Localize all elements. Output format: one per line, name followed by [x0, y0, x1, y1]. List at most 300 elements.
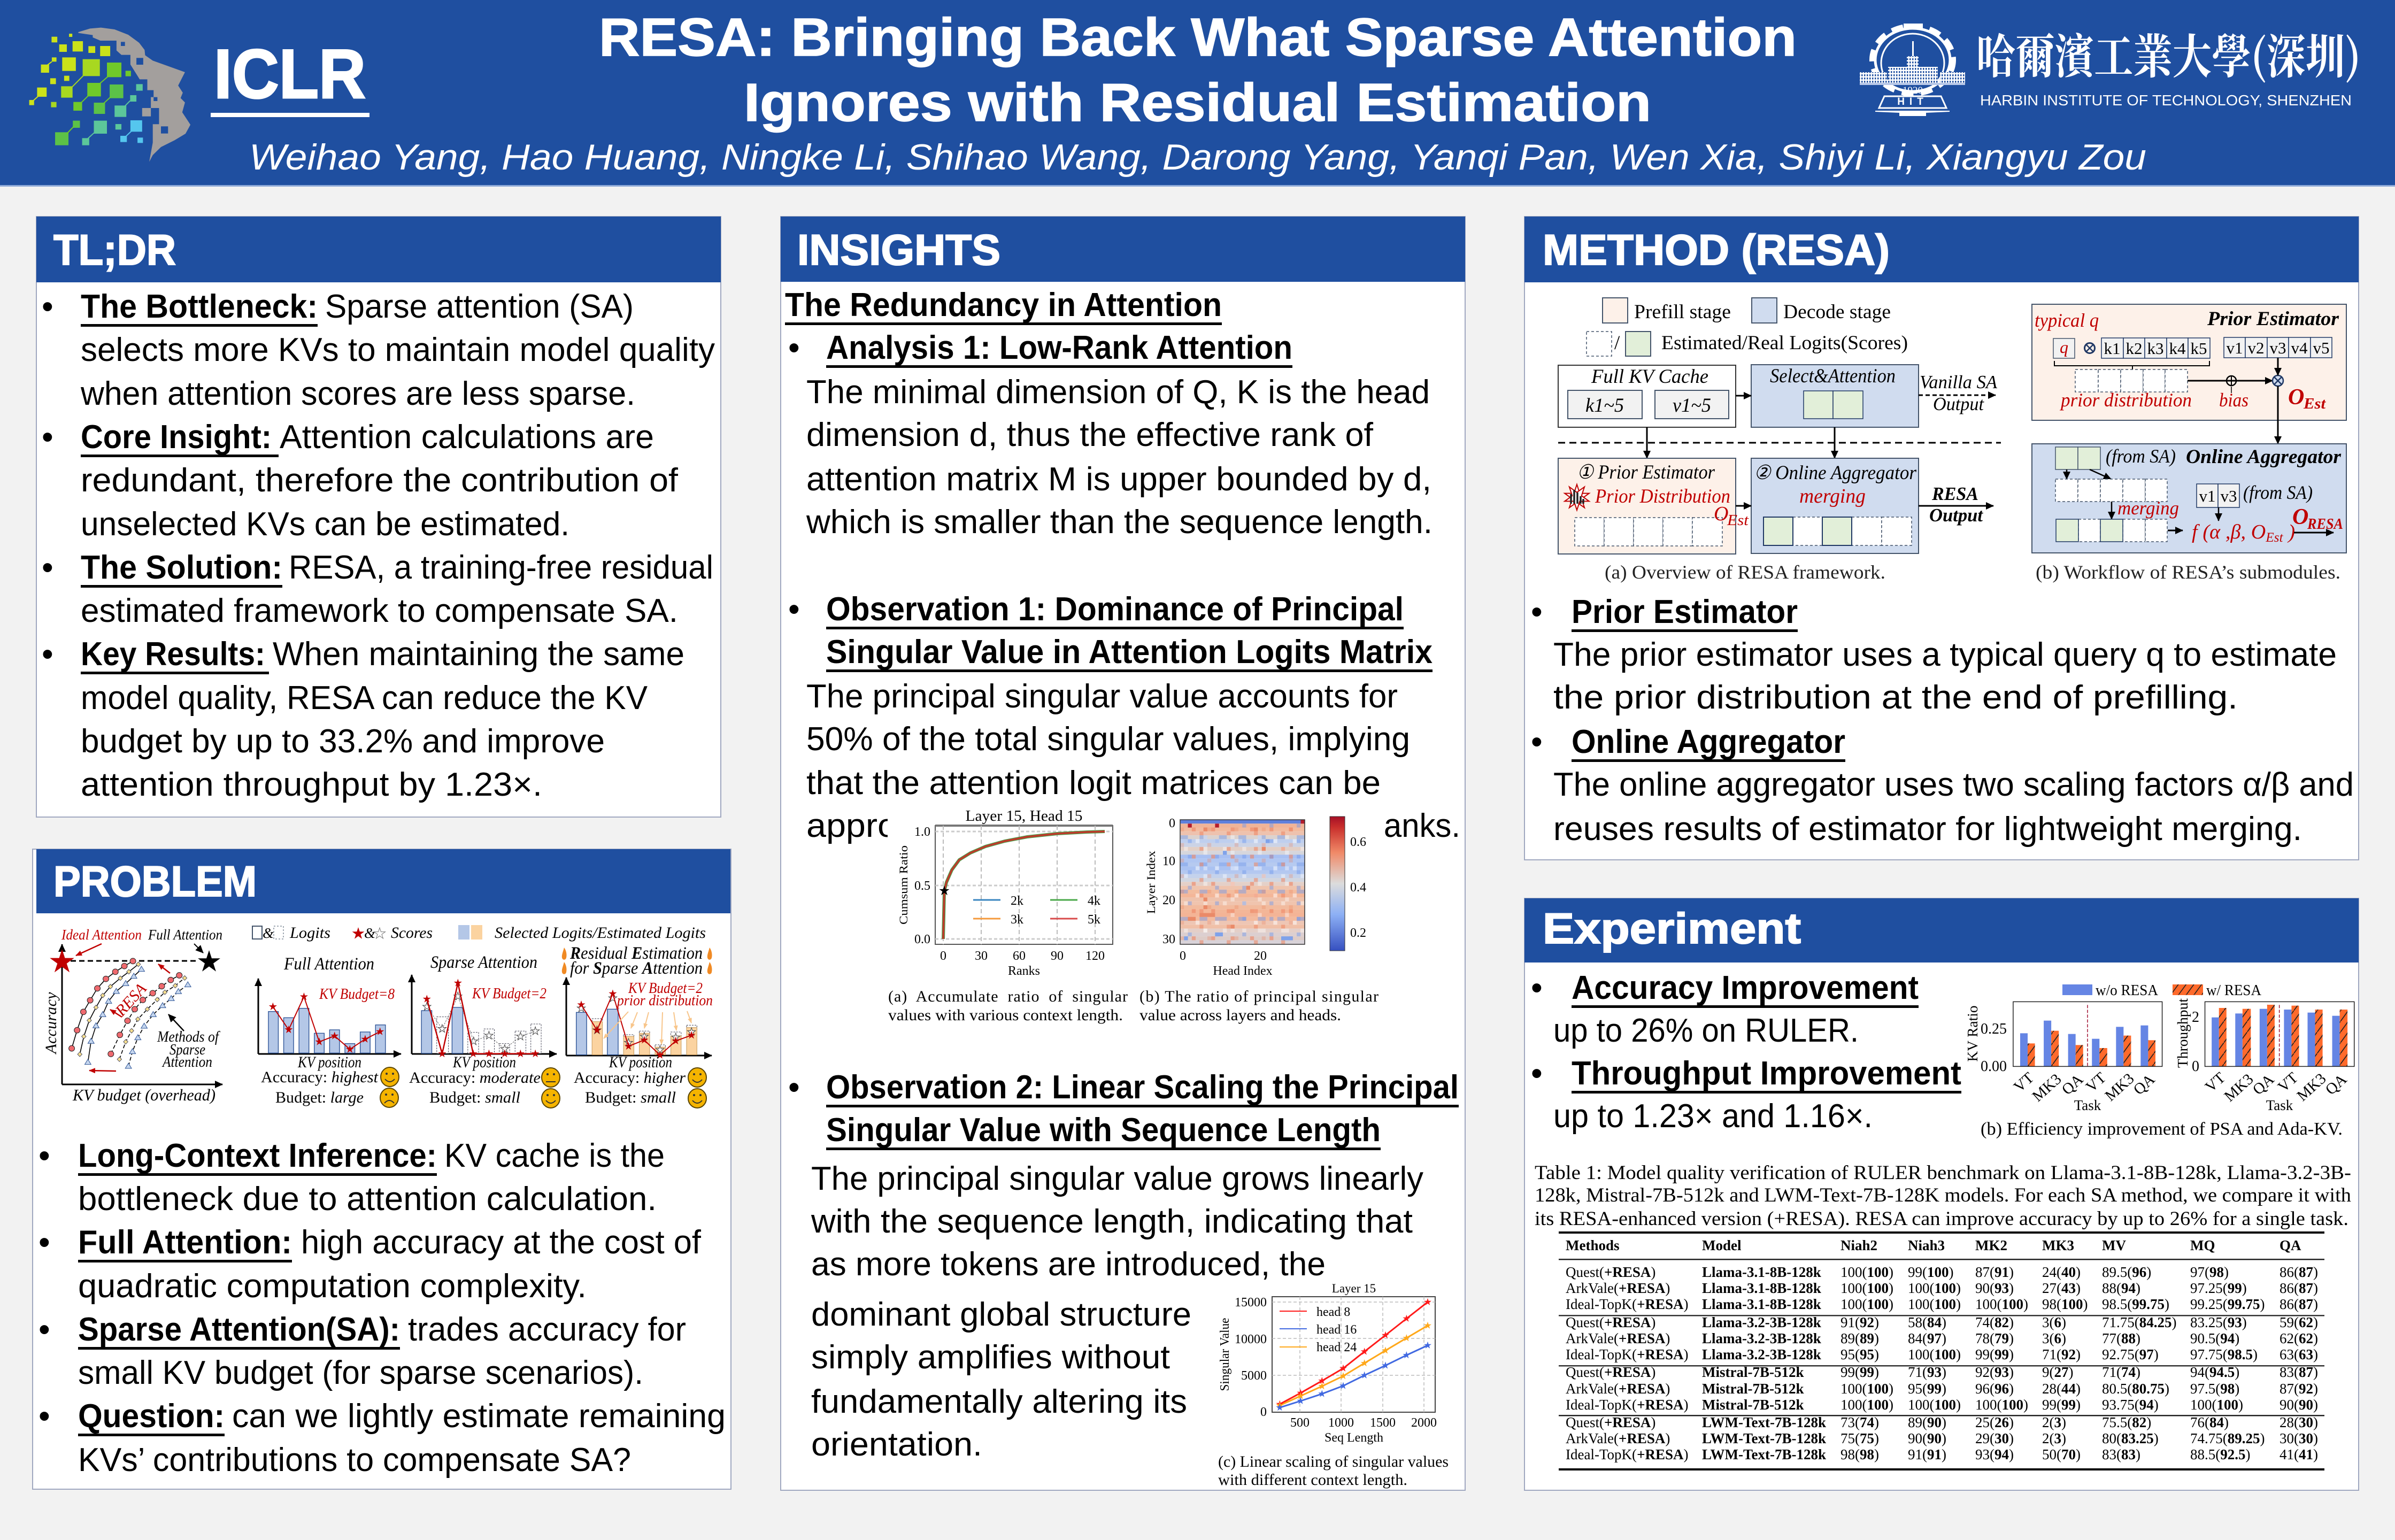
table: model quality verification: 59(62): [2280, 1314, 2318, 1330]
text block: TL;DR bullets: redundant, therefore the contribution of: [81, 462, 679, 499]
box: online aggregator workflow: (from SA): [2243, 482, 2313, 503]
chart: accuracy vs KV budget: Sparse: [170, 1042, 205, 1058]
text block: online aggregator: Online Aggregator: [1572, 723, 1845, 760]
arrow: cache to select: [1736, 395, 1751, 397]
box: full KV cache: Full KV Cache: [1591, 366, 1708, 388]
text block: observation 2: with the sequence length, indicating that: [811, 1203, 1413, 1240]
table: model quality verification: Llama-3.1-8B-128k: [1702, 1264, 1821, 1280]
text block: TL;DR bullets: •: [42, 419, 53, 456]
text block: PROBLEM bullets: Full Attention:: [78, 1224, 292, 1261]
table: model quality verification: LWM-Text-7B-128k: [1702, 1414, 1826, 1430]
text block: TL;DR bullets: unselected KVs can be estimated.: [81, 506, 569, 543]
text block: observation 1: •: [788, 591, 800, 628]
box: online aggregator workflow: O: [2292, 505, 2308, 529]
colorbar: 0.4: [1350, 881, 1366, 895]
figure: singular value line chart: [1218, 1282, 1437, 1445]
icon: HIT emblem: 1920: [1903, 85, 1923, 96]
bar chart: KV ratio: 0.00: [1981, 1058, 2007, 1075]
text block: online aggregator: The online aggregator uses two scaling factors α/β and: [1553, 766, 2354, 803]
table: model quality verification: 89.5(96): [2102, 1264, 2151, 1280]
figure: cumulative ratio plot: 90: [1051, 949, 1064, 963]
table: model quality verification: 100(100): [1840, 1296, 1893, 1312]
table caption: [1535, 1162, 2352, 1230]
arrow and label: O_Est: O: [1714, 503, 1728, 525]
text block: online aggregator: reuses results of estimator for lightweight merging.: [1553, 811, 2302, 848]
table: model quality verification: 71.75(84.25): [2102, 1314, 2176, 1330]
table: model quality verification: MK2: [1975, 1237, 2007, 1253]
box: online aggregator workflow: merging: [2117, 497, 2179, 519]
caption: figure c: (c) Linear scaling of singular values: [1218, 1453, 1449, 1470]
text block: improvements: up to 26% on RULER.: [1553, 1012, 1859, 1049]
table: model quality verification: 100(100): [2190, 1397, 2243, 1413]
chart: sparse attention: Accuracy: moderate: [409, 1069, 541, 1087]
figure: singular value line chart: head 8: [1316, 1305, 1350, 1319]
caption: figures a and b: (a) Accumulate ratio of singular: [888, 988, 1128, 1005]
chart: sparse attention: Sparse Attention: [430, 953, 537, 972]
legend: stages and logits: Prefill stage: [1634, 301, 1731, 323]
table: model quality verification: 86(87): [2280, 1296, 2318, 1312]
text block: TL;DR bullets: Core Insight:: [81, 419, 272, 456]
bar chart: KV ratio: [1965, 1002, 2162, 1113]
bar chart: KV ratio: 0.25: [1981, 1021, 2007, 1037]
text block: improvements: up to 1.23× and 1.16×.: [1553, 1098, 1873, 1135]
table: model quality verification: 90.5(94): [2190, 1330, 2239, 1346]
chart: sparse attention: KV Budget=2: [472, 985, 546, 1002]
text block: TL;DR bullets: •: [42, 636, 53, 673]
table: model quality verification: 3(6): [2042, 1314, 2066, 1330]
table caption: Table 1: Model quality verification of RULER benchmark on Llama-3.1-8B-128k, Llama-3.2-3B-: [1535, 1162, 2351, 1184]
table: model quality verification: 58(84): [1908, 1314, 1946, 1330]
table: model quality verification: 98(98): [1840, 1446, 1879, 1462]
RESA output: [1919, 483, 1993, 526]
text block: PROBLEM bullets: [38, 1137, 726, 1479]
legend: with and without RESA: w/ RESA: [2206, 982, 2262, 999]
bar chart: KV ratio: KV Ratio: [1965, 1005, 1981, 1062]
text block: TL;DR bullets: budget by up to 33.2% and improve: [81, 723, 605, 760]
chart: accuracy vs KV budget: Attention: [161, 1054, 212, 1071]
text block: observation 1: Singular Value in Attention Logits Matrix: [826, 634, 1433, 671]
table: model quality verification: 100(100): [1840, 1381, 1893, 1397]
panel: PROBLEM: [33, 849, 731, 1489]
box: online aggregator workflow: v3: [2220, 487, 2237, 505]
figure: singular value line chart: head 16: [1316, 1323, 1357, 1337]
text block: TL;DR bullets: selects more KVs to maintain model quality: [81, 332, 715, 368]
icon: prior distribution burst: [1561, 480, 1595, 513]
caption: figures a and b: (b) The ratio of principal singular: [1139, 988, 1379, 1005]
bar chart: KV ratio: QA: [2130, 1071, 2158, 1098]
colorbar: 0.6: [1350, 835, 1366, 849]
caption: workflow: (b) Workflow of RESA’s submodules.: [2036, 561, 2340, 583]
box: full KV cache: v1~5: [1673, 395, 1711, 417]
caption: figures a and b: [888, 988, 1379, 1024]
table: model quality verification: 87(91): [1975, 1264, 2014, 1280]
figure: singular value line chart: 5000: [1241, 1369, 1267, 1383]
table: model quality verification: 90(93): [1975, 1280, 2014, 1296]
table: model quality verification: Llama-3.1-8B-128k: [1702, 1296, 1821, 1312]
figure: cumulative ratio plot: 5k: [1088, 913, 1100, 927]
text block: observation 2: •: [788, 1069, 800, 1106]
chart: accuracy vs KV budget: KV budget (overhead): [72, 1085, 215, 1104]
bar chart: throughput: 2: [2192, 1009, 2199, 1026]
table: model quality verification: 94(94.5): [2190, 1364, 2239, 1380]
text block: observation 1: The principal singular value accounts for: [806, 678, 1398, 715]
text block: improvements: •: [1531, 1055, 1543, 1092]
panel: TL;DR: [36, 217, 721, 817]
text block: prior estimator: [1531, 594, 2337, 716]
table: model quality verification: Llama-3.2-3B-128k: [1702, 1330, 1821, 1346]
box: online aggregator workflow: RESA: [2307, 516, 2343, 533]
figure: singular value line chart: 1000: [1328, 1416, 1354, 1430]
bar chart: KV ratio: VT: [2011, 1069, 2037, 1096]
box: online aggregator workflow: (from SA): [2106, 445, 2176, 467]
figure: singular value line chart: Singular Value: [1218, 1318, 1232, 1391]
box: prior estimator workflow: v3: [2269, 338, 2286, 357]
table: model quality verification: 97(98): [2190, 1264, 2229, 1280]
table: model quality verification: Mistral-7B-512k: [1702, 1364, 1804, 1380]
figure: singular value line chart: 500: [1290, 1416, 1310, 1430]
table: model quality verification: 100(100): [1908, 1296, 1961, 1312]
table: model quality verification: 95(95): [1840, 1346, 1879, 1362]
table: model quality verification: 83.25(93): [2190, 1314, 2247, 1330]
table: model quality verification: 95(99): [1908, 1381, 1946, 1397]
box: online aggregator workflow: ): [2283, 521, 2295, 543]
legend: logits, scores, selected: Scores: [391, 924, 433, 942]
table: model quality verification: Mistral-7B-512k: [1702, 1381, 1804, 1397]
table: model quality verification: 2(3): [2042, 1430, 2066, 1446]
caption: figures a and b: value across layers and heads.: [1139, 1006, 1341, 1024]
figure: singular value heatmap: 0: [1180, 949, 1186, 963]
icon: smile: [688, 1068, 706, 1087]
text block: improvements: Accuracy Improvement: [1572, 969, 1919, 1006]
box: prior estimator workflow: k1: [2104, 339, 2121, 358]
heading: Experiment: [1524, 898, 2359, 962]
text block: TL;DR bullets: attention throughput by 1.23×.: [81, 766, 542, 803]
box: prior estimator workflow: k5: [2190, 339, 2207, 358]
box: select and attention: [1751, 365, 1919, 427]
table: model quality verification: 74.75(89.25): [2190, 1430, 2265, 1446]
text block: observation 1: that the attention logit matrices can be: [806, 765, 1381, 802]
table: model quality verification: Llama-3.1-8B-128k: [1702, 1280, 1821, 1296]
table: model quality verification: ArkVale(+RESA): [1566, 1280, 1670, 1296]
chart: residual estimation for sparse attention: [562, 944, 713, 1108]
header banner: [0, 0, 2395, 187]
bar chart: throughput: QA: [2250, 1071, 2277, 1098]
table: model quality verification: 73(74): [1840, 1414, 1879, 1430]
chart: full attention: KV position: [297, 1053, 361, 1071]
table: model quality verification: 100(100): [1975, 1296, 2028, 1312]
text block: PROBLEM bullets: •: [38, 1311, 50, 1348]
heading: TL;DR: [36, 217, 721, 282]
text block: improvements: •: [1531, 969, 1543, 1006]
arrow and label: O_Est: Est: [1727, 512, 1749, 529]
table: model quality verification: Niah3: [1908, 1237, 1945, 1253]
text block: prior estimator: Prior Estimator: [1572, 594, 1798, 630]
chart: residual estimation for sparse attention: prior distribution: [616, 992, 713, 1009]
table caption: its RESA-enhanced version (+RESA). RESA can improve accuracy by up to 26% for a single task.: [1535, 1208, 2348, 1230]
figure: singular value heatmap: Head Index: [1213, 964, 1273, 978]
table: model quality verification: 83(87): [2280, 1364, 2318, 1380]
figure: cumulative ratio plot: 0.5: [914, 879, 930, 893]
table: model quality verification: 89(90): [1908, 1414, 1946, 1430]
vanilla SA output: [1919, 372, 1998, 414]
figure: cumulative ratio plot: 4k: [1088, 894, 1100, 908]
text block: observation 2: fundamentally altering its: [811, 1383, 1187, 1420]
text block: TL;DR bullets: Key Results:: [81, 636, 265, 673]
table: model quality verification: 83(83): [2102, 1446, 2140, 1462]
text block: prior estimator: •: [1531, 594, 1543, 630]
text block: PROBLEM bullets: •: [38, 1137, 50, 1174]
figure: singular value heatmap: 20: [1254, 949, 1267, 963]
chart: accuracy vs KV budget: Ideal Attention: [61, 927, 142, 943]
arrows: top row to bottom row: [1558, 427, 2001, 458]
table: model quality verification: 100(100): [1840, 1264, 1893, 1280]
table: model quality verification: 71(92): [2042, 1346, 2081, 1362]
table: model quality verification: 29(30): [1975, 1430, 2014, 1446]
box: prior estimator workflow: k3: [2147, 339, 2163, 358]
legend: stages and logits: [1587, 298, 1908, 356]
legend: logits, scores, selected: [252, 924, 706, 942]
table: model quality verification: 92.75(97): [2102, 1346, 2159, 1362]
text block: observation 2: orientation.: [811, 1426, 982, 1463]
table: model quality verification: 91(91): [1908, 1446, 1946, 1462]
box: prior estimator workflow: typical q: [2035, 310, 2099, 331]
text block: observation 2: simply amplifies without: [811, 1339, 1170, 1376]
table: model quality verification: 98.5(99.75): [2102, 1296, 2169, 1312]
text block: PROBLEM bullets: can we lightly estimate remaining: [232, 1398, 726, 1435]
table: model quality verification: 92(93): [1975, 1364, 2014, 1380]
table: model quality verification: Llama-3.2-3B-128k: [1702, 1346, 1821, 1362]
table: model quality verification: 28(44): [2042, 1381, 2081, 1397]
box: online aggregator: [1751, 458, 1919, 553]
bar chart: throughput: MK3: [2294, 1070, 2329, 1105]
table: model quality verification: 99(99): [2042, 1397, 2081, 1413]
figure: cumulative ratio plot: 3k: [1011, 913, 1023, 927]
text block: observation 2: The principal singular value grows linearly: [811, 1160, 1423, 1197]
chart: accuracy vs KV budget: Full Attention: [148, 927, 222, 943]
RESA output: Output: [1929, 505, 1983, 526]
table: model quality verification: MV: [2102, 1237, 2126, 1253]
chart: accuracy vs KV budget: Accuracy: [42, 992, 60, 1054]
table: model quality verification: Ideal-TopK(+RESA): [1566, 1446, 1688, 1462]
table: model quality verification: [1559, 1231, 2329, 1473]
icon: frown: [380, 1088, 398, 1107]
box: prior estimator workflow: bias: [2219, 389, 2248, 411]
box: online aggregator workflow: [2032, 444, 2346, 553]
text block: TL;DR bullets: •: [42, 549, 53, 586]
heading: INSIGHTS: [781, 217, 1465, 282]
chart: full attention: Full Attention: [283, 954, 374, 974]
vanilla SA output: Output: [1933, 394, 1984, 414]
icon: smile: [542, 1089, 560, 1108]
text block: TL;DR bullets: When maintaining the same: [273, 636, 684, 673]
bar chart: KV ratio: MK3: [2029, 1071, 2065, 1105]
table: model quality verification: Quest(+RESA): [1566, 1364, 1655, 1380]
table: model quality verification: 75.5(82): [2102, 1414, 2151, 1430]
table: model quality verification: 50(70): [2042, 1446, 2081, 1462]
box: prior estimator workflow: prior distribution: [2059, 389, 2192, 411]
chart: residual estimation for sparse attention: Accuracy: higher: [574, 1069, 686, 1087]
box: prior estimator: [1558, 458, 1736, 554]
text block: observation 1: [788, 591, 1460, 844]
box: prior estimator workflow: k4: [2169, 339, 2186, 358]
text block: analysis 1: which is smaller than the sequence length.: [806, 504, 1433, 541]
arrow and label: O_Est: [1714, 503, 1751, 529]
title: Ignores with Residual Estimation: [744, 73, 1651, 133]
table: model quality verification: 86(87): [2280, 1264, 2318, 1280]
panel: Experiment: [1524, 898, 2359, 1490]
table: model quality verification: 80(83.25): [2102, 1430, 2159, 1446]
chart: accuracy vs KV budget: RESA: [112, 980, 150, 1020]
figure: singular value line chart: 10000: [1235, 1333, 1267, 1346]
box: prior estimator workflow: O: [2288, 385, 2304, 410]
authors: Weihao Yang, Hao Huang, Ningke Li, Shihao Wang, Darong Yang, Yanqi Pan, Wen Xia, Shiyi Li, Xiangyu Zou: [249, 137, 2146, 178]
box: prior estimator workflow: v5: [2313, 338, 2329, 357]
table: model quality verification: 71(93): [1908, 1364, 1946, 1380]
bar chart: KV ratio: VT: [2083, 1069, 2109, 1096]
chart: full attention: [258, 954, 401, 1107]
chart: residual estimation for sparse attention: Residual Estimation: [569, 944, 703, 963]
caption: figure c: [1218, 1453, 1449, 1489]
figure: cumulative ratio plot: 0.0: [914, 933, 930, 946]
table: model quality verification: 78(79): [1975, 1330, 2014, 1346]
caption: efficiency: (b) Efficiency improvement of PSA and Ada-KV.: [1981, 1119, 2343, 1139]
table: model quality verification: Methods: [1566, 1237, 1619, 1253]
heading: INSIGHTS: INSIGHTS: [797, 226, 1000, 274]
subheading: the redundancy in attention: The Redundancy in Attention: [785, 287, 1222, 324]
table: model quality verification: 27(43): [2042, 1280, 2081, 1296]
heading: Experiment: Experiment: [1543, 905, 1801, 953]
text block: PROBLEM bullets: Sparse Attention(SA):: [78, 1311, 400, 1348]
box: full KV cache: [1558, 365, 1736, 427]
figure: singular value line chart: head 24: [1316, 1341, 1357, 1354]
text block: TL;DR bullets: The Solution:: [81, 549, 282, 586]
text block: TL;DR bullets: The Bottleneck:: [81, 288, 318, 325]
heading: TL;DR: TL;DR: [53, 226, 176, 274]
chart: accuracy vs KV budget: [42, 927, 222, 1104]
box: prior estimator workflow: k2: [2126, 339, 2142, 358]
bar chart: throughput: Task: [2266, 1097, 2293, 1113]
bar chart: throughput: QA: [2322, 1071, 2350, 1098]
table: model quality verification: 84(97): [1908, 1330, 1946, 1346]
table: model quality verification: Niah2: [1840, 1237, 1877, 1253]
text block: analysis 1: attention matrix M is upper bounded by d,: [806, 461, 1431, 498]
box: prior estimator workflow: v2: [2248, 338, 2264, 357]
text block: analysis 1: Analysis 1: Low-Rank Attention: [826, 329, 1292, 366]
table: model quality verification: 91(92): [1840, 1314, 1879, 1330]
box: prior estimator workflow: q: [2060, 337, 2068, 357]
chart: sparse attention: [409, 953, 560, 1108]
diagram: workflow of RESA submodules: [2032, 304, 2346, 583]
bar chart: KV ratio: QA: [2059, 1071, 2086, 1098]
box: prior estimator workflow: Est: [2303, 396, 2326, 412]
text block: PROBLEM bullets: •: [38, 1224, 50, 1261]
table: model quality verification: 2(3): [2042, 1414, 2066, 1430]
table: model quality verification: LWM-Text-7B-128k: [1702, 1430, 1826, 1446]
text block: online aggregator: •: [1531, 723, 1543, 760]
figure: cumulative ratio plot: 30: [975, 949, 988, 963]
table: model quality verification: 3(6): [2042, 1330, 2066, 1346]
table: model quality verification: 99(99): [1840, 1364, 1879, 1380]
heading: PROBLEM: PROBLEM: [53, 858, 257, 906]
table: model quality verification: Ideal-TopK(+RESA): [1566, 1296, 1688, 1312]
box: prior estimator workflow: Prior Estimator: [2207, 308, 2339, 330]
text block: TL;DR bullets: [42, 288, 715, 803]
table: model quality verification: 25(26): [1975, 1414, 2014, 1430]
table: model quality verification: 74(82): [1975, 1314, 2014, 1330]
text block: online aggregator: [1531, 723, 2354, 848]
bar chart: throughput: [2175, 998, 2354, 1113]
text block: TL;DR bullets: estimated framework to compensate SA.: [81, 592, 678, 629]
figure: cumulative ratio plot: 60: [1013, 949, 1026, 963]
chart: full attention: Budget: large: [275, 1089, 364, 1106]
heading: METHOD (RESA): [1524, 217, 2359, 282]
table: model quality verification: Quest(+RESA): [1566, 1264, 1655, 1280]
chart: full attention: Accuracy: highest: [261, 1068, 379, 1086]
text block: observation 2: Singular Value with Sequence Length: [826, 1112, 1381, 1149]
figure: singular value heatmap: [1144, 817, 1366, 978]
text block: observation 2: as more tokens are introduced, the: [811, 1246, 1326, 1283]
text block: prior estimator: the prior distribution at the end of prefilling.: [1553, 679, 2238, 716]
table: model quality verification: 63(63): [2280, 1346, 2318, 1362]
figure: cumulative ratio plot: Layer 15, Head 15: [966, 807, 1082, 825]
text block: TL;DR bullets: Sparse attention (SA): [325, 288, 634, 325]
text block: prior estimator: The prior estimator uses a typical query q to estimate: [1553, 636, 2337, 673]
table: model quality verification: Model: [1702, 1237, 1741, 1253]
figure: cumulative ratio plot: [897, 807, 1113, 978]
legend: logits, scores, selected: &: [364, 925, 375, 941]
text block: observation 1: 50% of the total singular values, implying: [806, 721, 1410, 758]
caption: figure c: with different context length.: [1218, 1471, 1407, 1489]
figure: singular value line chart: Layer 15: [1332, 1282, 1376, 1295]
text block: observation 2: [788, 1069, 1459, 1463]
table: model quality verification: ArkVale(+RESA): [1566, 1330, 1670, 1346]
box: online aggregator: merging: [1799, 485, 1866, 507]
table: model quality verification: 62(62): [2280, 1330, 2318, 1346]
table: model quality verification: 89(89): [1840, 1330, 1879, 1346]
text block: TL;DR bullets: when attention scores are less sparse.: [80, 375, 635, 412]
table: model quality verification: 100(100): [1840, 1280, 1893, 1296]
figure: cumulative ratio plot: 2k: [1011, 894, 1023, 908]
table: model quality verification: 99(99): [1975, 1346, 2014, 1362]
figure: singular value line chart: 2000: [1411, 1416, 1437, 1430]
table: model quality verification: Quest(+RESA): [1566, 1414, 1655, 1430]
figure: singular value heatmap: 0: [1169, 817, 1175, 830]
ICLR wordmark: ICLR: [214, 35, 366, 113]
figure: singular value heatmap: 20: [1162, 894, 1175, 907]
figure: cumulative ratio plot: Cumsum Ratio: [897, 845, 910, 925]
box: full KV cache: k1~5: [1585, 395, 1624, 417]
figure: cumulative ratio plot: 1.0: [914, 825, 930, 839]
table: model quality verification: 93(94): [1975, 1446, 2014, 1462]
bar chart: throughput: Throughput: [2175, 998, 2191, 1068]
icon: smile: [381, 1067, 399, 1087]
legend: stages and logits: Estimated/Real Logits(Scores): [1661, 332, 1908, 354]
chart: residual estimation for sparse attention: Budget: small: [585, 1089, 676, 1106]
figure: singular value heatmap: 10: [1162, 854, 1175, 868]
table: model quality verification: 28(30): [2280, 1414, 2318, 1430]
text block: PROBLEM bullets: Long-Context Inference:: [78, 1137, 437, 1174]
figure: singular value line chart: 0: [1260, 1405, 1267, 1419]
figure: singular value heatmap: Layer Index: [1144, 851, 1158, 914]
text block: analysis 1: dimension d, thus the effective rank of: [806, 417, 1374, 453]
text block: analysis 1: The minimal dimension of Q, K is the head: [806, 374, 1430, 411]
figure: singular value heatmap: 30: [1162, 933, 1175, 946]
title: [599, 7, 1797, 133]
text block: PROBLEM bullets: •: [38, 1398, 50, 1435]
table: model quality verification: 76(84): [2190, 1414, 2229, 1430]
table: model quality verification: 9(27): [2042, 1364, 2074, 1380]
icon: HIT emblem: [1860, 24, 1965, 116]
